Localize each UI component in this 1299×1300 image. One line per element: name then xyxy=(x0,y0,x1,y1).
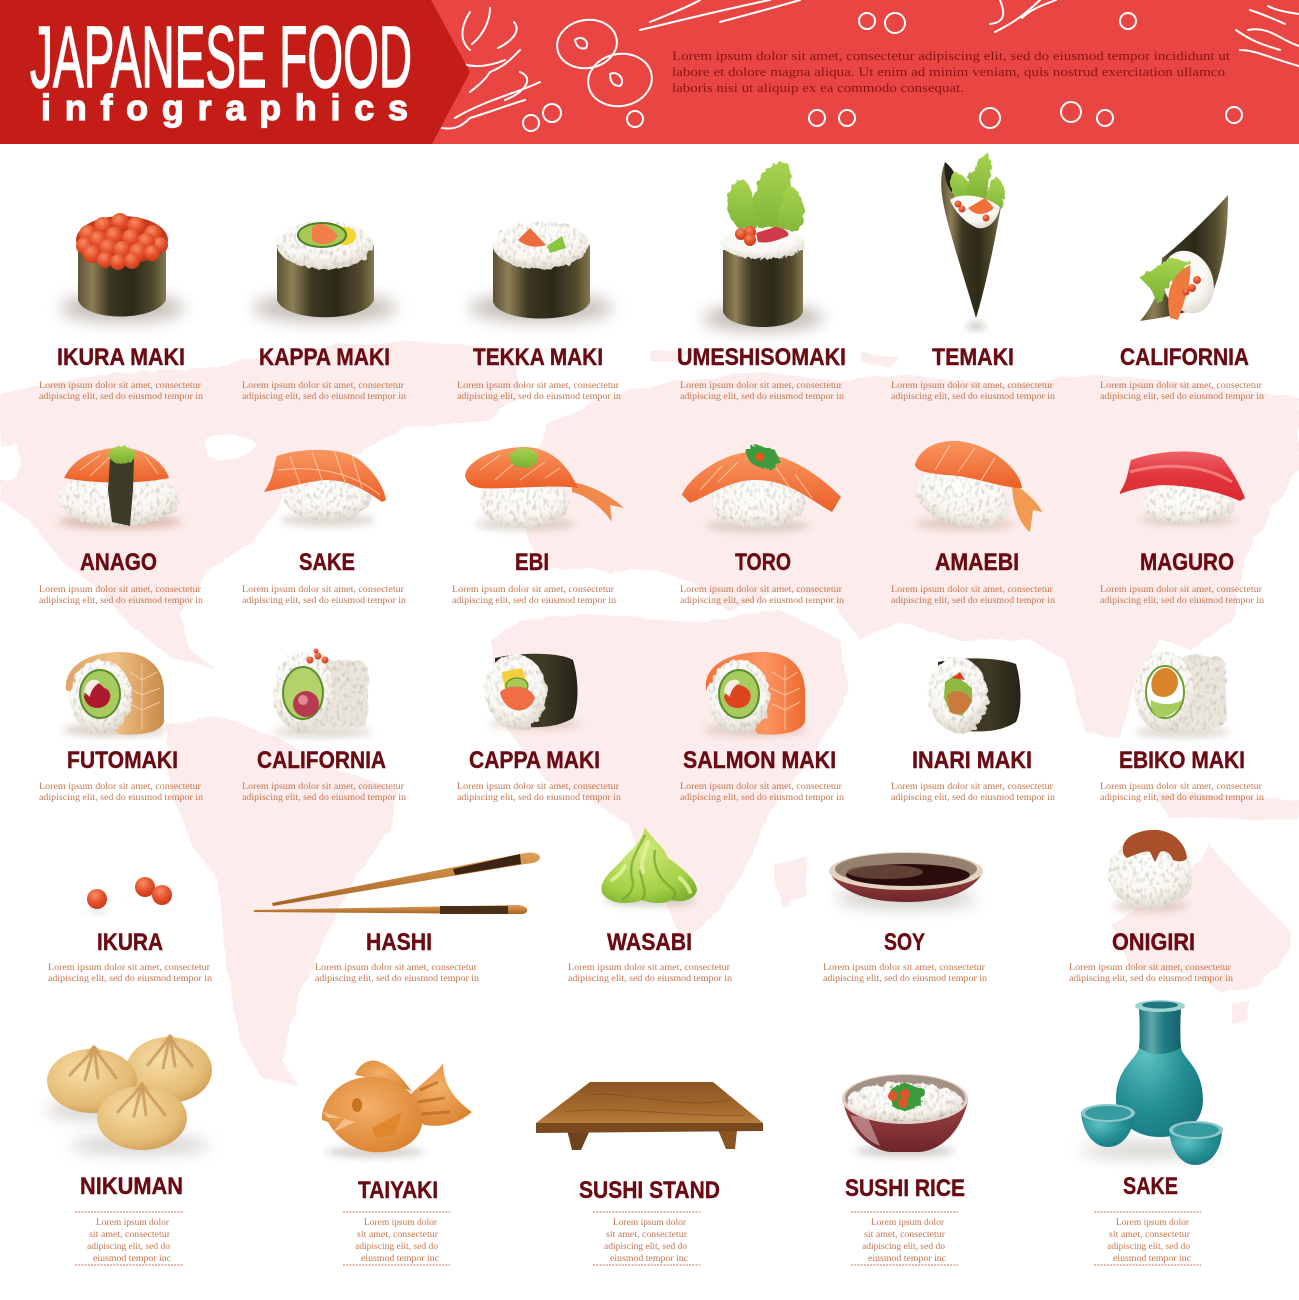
description: Lorem ipsum dolor sit amet, consectetur xyxy=(48,962,211,973)
item: Ebiko Maki xyxy=(1100,652,1264,803)
description xyxy=(680,781,844,803)
icon: california piece xyxy=(272,648,372,737)
description: eiusmod tempor inc xyxy=(868,1253,946,1264)
description xyxy=(457,781,621,803)
description xyxy=(48,962,212,984)
description: adipiscing elit, sed do eiusmod tempor in xyxy=(1100,391,1264,402)
icon: kappa maki roll xyxy=(253,221,397,322)
description xyxy=(457,380,621,402)
description: sit amet, consectetur xyxy=(606,1229,688,1240)
icon: soy sauce dish xyxy=(829,852,983,907)
description xyxy=(242,584,406,606)
description xyxy=(1100,584,1264,606)
label: UMESHISOMAKI xyxy=(677,344,846,371)
description: Lorem ipsum dolor xyxy=(613,1217,687,1228)
description xyxy=(593,1212,700,1265)
label: TAIYAKI xyxy=(358,1177,438,1204)
description: adipiscing elit, sed do xyxy=(862,1241,945,1252)
description: Lorem ipsum dolor xyxy=(96,1217,170,1228)
description: adipiscing elit, sed do eiusmod tempor in xyxy=(680,792,844,803)
item: Sushi Stand xyxy=(536,1082,763,1265)
description: Lorem ipsum dolor sit amet, consectetur xyxy=(1100,584,1263,595)
label: ANAGO xyxy=(80,549,157,576)
description: adipiscing elit, sed do eiusmod tempor in xyxy=(891,391,1055,402)
label: SALMON MAKI xyxy=(683,747,836,774)
intro text: Lorem ipsum dolor sit amet, consectetur adipiscing elit, sed do eiusmod tempor incididunt ut xyxy=(672,48,1230,63)
label: NIKUMAN xyxy=(80,1173,183,1200)
description: sit amet, consectetur xyxy=(89,1229,171,1240)
description xyxy=(242,781,406,803)
description: Lorem ipsum dolor sit amet, consectetur xyxy=(891,380,1054,391)
item: Anago xyxy=(39,446,203,606)
item: Wasabi xyxy=(568,827,732,984)
description: Lorem ipsum dolor sit amet, consectetur xyxy=(891,584,1054,595)
item: Soy xyxy=(823,852,987,984)
icon: rice bowl xyxy=(842,1074,968,1156)
item: Maguro xyxy=(1100,452,1264,606)
icon: sake flask and cups xyxy=(1080,1000,1223,1165)
title: JAPANESE FOOD xyxy=(30,9,412,106)
icon: chopsticks xyxy=(254,852,540,914)
icon: amaebi nigiri xyxy=(908,441,1042,537)
description: adipiscing elit, sed do eiusmod tempor in xyxy=(242,391,406,402)
item: Hashi xyxy=(254,852,540,984)
description: Lorem ipsum dolor xyxy=(1116,1217,1190,1228)
icon: taiyaki fish cake xyxy=(322,1061,472,1157)
item: Ebi xyxy=(452,447,624,606)
intro text: laboris nisi ut aliquip ex ea commodo consequat. xyxy=(672,80,964,95)
description: adipiscing elit, sed do xyxy=(1107,1241,1190,1252)
item: Kappa Maki xyxy=(242,221,406,402)
description: Lorem ipsum dolor sit amet, consectetur xyxy=(242,584,405,595)
description: adipiscing elit, sed do eiusmod tempor in xyxy=(1100,792,1264,803)
description xyxy=(680,584,844,606)
description: adipiscing elit, sed do eiusmod tempor in xyxy=(457,792,621,803)
label: HASHI xyxy=(366,929,432,956)
description: Lorem ipsum dolor sit amet, consectetur xyxy=(891,781,1054,792)
label: MAGURO xyxy=(1140,549,1234,576)
description: Lorem ipsum dolor sit amet, consectetur xyxy=(39,380,202,391)
description xyxy=(39,380,203,402)
label: TEMAKI xyxy=(932,344,1014,371)
item: Sushi Rice xyxy=(842,1074,968,1265)
label: AMAEBI xyxy=(935,549,1019,576)
description: adipiscing elit, sed do eiusmod tempor in xyxy=(568,973,732,984)
description: adipiscing elit, sed do eiusmod tempor in xyxy=(891,792,1055,803)
description: Lorem ipsum dolor sit amet, consectetur xyxy=(452,584,615,595)
label: IKURA xyxy=(97,929,163,956)
description: adipiscing elit, sed do eiusmod tempor in xyxy=(1100,595,1264,606)
icon: temaki cone xyxy=(941,153,1004,329)
icon: inari maki piece xyxy=(924,654,1020,736)
label: SOY xyxy=(884,929,925,956)
world map background xyxy=(0,342,1299,1086)
item: California piece xyxy=(242,648,406,803)
icon: roe balls xyxy=(87,877,172,913)
item: California hand roll xyxy=(1100,195,1264,402)
description: eiusmod tempor inc xyxy=(610,1253,688,1264)
icon: nikuman buns xyxy=(46,1034,212,1153)
item: Ikura xyxy=(48,877,212,984)
description xyxy=(568,962,732,984)
label: CAPPA MAKI xyxy=(469,747,600,774)
label: EBI xyxy=(515,549,549,576)
description: adipiscing elit, sed do eiusmod tempor in xyxy=(457,391,621,402)
description xyxy=(1094,1212,1201,1265)
description xyxy=(891,781,1055,803)
label: EBIKO MAKI xyxy=(1119,747,1245,774)
description: Lorem ipsum dolor sit amet, consectetur xyxy=(457,781,620,792)
label: FUTOMAKI xyxy=(67,747,178,774)
label: INARI MAKI xyxy=(912,747,1032,774)
item: Amaebi xyxy=(891,441,1055,606)
icon: cappa maki piece xyxy=(481,651,581,733)
icon: tekka maki roll xyxy=(469,221,613,322)
description: adipiscing elit, sed do eiusmod tempor in xyxy=(823,973,987,984)
item: Umeshisomaki xyxy=(677,162,846,402)
item: Salmon Maki xyxy=(680,652,844,803)
description: adipiscing elit, sed do eiusmod tempor in xyxy=(48,973,212,984)
description: Lorem ipsum dolor sit amet, consectetur xyxy=(242,781,405,792)
item: Sake nigiri xyxy=(242,450,406,606)
description xyxy=(823,962,987,984)
intro text xyxy=(672,48,1230,95)
icon: california cone xyxy=(1140,195,1228,321)
item: Taiyaki xyxy=(322,1061,472,1265)
label: WASABI xyxy=(607,929,692,956)
description: adipiscing elit, sed do eiusmod tempor in xyxy=(452,595,616,606)
subtitle: infographics xyxy=(41,87,408,128)
intro text: labore et dolore magna aliqua. Ut enim ad minim veniam, quis nostrud exercitation ullamco xyxy=(672,64,1225,79)
description: Lorem ipsum dolor sit amet, consectetur xyxy=(1069,962,1232,973)
description: adipiscing elit, sed do xyxy=(604,1241,687,1252)
description: adipiscing elit, sed do eiusmod tempor in xyxy=(1069,973,1233,984)
icon: anago nigiri xyxy=(58,446,182,529)
description: eiusmod tempor inc xyxy=(93,1253,171,1264)
description: Lorem ipsum dolor sit amet, consectetur xyxy=(680,584,843,595)
description: eiusmod tempor inc xyxy=(361,1253,439,1264)
label: SUSHI RICE xyxy=(845,1175,965,1202)
description: sit amet, consectetur xyxy=(1109,1229,1191,1240)
label: ONIGIRI xyxy=(1112,929,1195,956)
description: Lorem ipsum dolor sit amet, consectetur xyxy=(457,380,620,391)
description: Lorem ipsum dolor xyxy=(364,1217,438,1228)
description xyxy=(75,1212,183,1265)
item: Inari Maki xyxy=(891,654,1055,803)
description xyxy=(343,1212,450,1265)
description: adipiscing elit, sed do eiusmod tempor in xyxy=(242,595,406,606)
description: sit amet, consectetur xyxy=(357,1229,439,1240)
description: Lorem ipsum dolor sit amet, consectetur xyxy=(1100,781,1263,792)
label: SUSHI STAND xyxy=(579,1177,720,1204)
description: adipiscing elit, sed do eiusmod tempor in xyxy=(315,973,479,984)
title ribbon xyxy=(0,0,470,144)
description: Lorem ipsum dolor sit amet, consectetur xyxy=(315,962,478,973)
icon: umeshisomaki roll with leaves xyxy=(703,162,823,330)
description: sit amet, consectetur xyxy=(864,1229,946,1240)
description xyxy=(1069,962,1233,984)
icon: ebiko maki piece xyxy=(1134,652,1230,737)
description xyxy=(680,380,844,402)
description: Lorem ipsum dolor sit amet, consectetur xyxy=(242,380,405,391)
description xyxy=(39,584,203,606)
description: Lorem ipsum dolor sit amet, consectetur xyxy=(39,781,202,792)
icon: toro nigiri xyxy=(682,445,841,532)
label: CALIFORNIA xyxy=(1120,344,1249,371)
item: Sake bottle xyxy=(1080,1000,1223,1265)
description: Lorem ipsum dolor sit amet, consectetur xyxy=(39,584,202,595)
icon: maguro nigiri xyxy=(1120,452,1245,525)
label: SAKE xyxy=(299,549,355,576)
item: Futomaki xyxy=(39,652,203,803)
header background xyxy=(0,0,1299,144)
label: TORO xyxy=(735,549,791,576)
description: Lorem ipsum dolor sit amet, consectetur xyxy=(1100,380,1263,391)
header banner xyxy=(0,0,1299,144)
description: adipiscing elit, sed do eiusmod tempor in xyxy=(39,595,203,606)
description: Lorem ipsum dolor sit amet, consectetur xyxy=(823,962,986,973)
label: TEKKA MAKI xyxy=(473,344,603,371)
description: Lorem ipsum dolor xyxy=(871,1217,945,1228)
description: adipiscing elit, sed do xyxy=(355,1241,438,1252)
description: adipiscing elit, sed do xyxy=(87,1241,170,1252)
label: CALIFORNIA xyxy=(257,747,386,774)
map inland seas xyxy=(0,435,650,600)
description: adipiscing elit, sed do eiusmod tempor in xyxy=(39,391,203,402)
description: adipiscing elit, sed do eiusmod tempor in xyxy=(680,391,844,402)
description: adipiscing elit, sed do eiusmod tempor in xyxy=(242,792,406,803)
item: Cappa Maki xyxy=(457,651,621,803)
item: Onigiri xyxy=(1069,830,1233,984)
icon: ikura maki roll xyxy=(60,213,184,322)
description: adipiscing elit, sed do eiusmod tempor in xyxy=(680,595,844,606)
label: SAKE xyxy=(1123,1173,1178,1200)
label: IKURA MAKI xyxy=(57,344,185,371)
icon: sake nigiri xyxy=(264,450,386,526)
description xyxy=(1100,380,1264,402)
description xyxy=(242,380,406,402)
description: eiusmod tempor inc xyxy=(1113,1253,1191,1264)
description: Lorem ipsum dolor sit amet, consectetur xyxy=(680,380,843,391)
item: Temaki xyxy=(891,153,1055,402)
sketch decorations xyxy=(442,0,1299,131)
description xyxy=(891,584,1055,606)
description: adipiscing elit, sed do eiusmod tempor in xyxy=(891,595,1055,606)
description: Lorem ipsum dolor sit amet, consectetur xyxy=(680,781,843,792)
icon: salmon maki piece xyxy=(703,652,807,736)
description xyxy=(452,584,616,606)
icon: onigiri xyxy=(1108,830,1192,912)
label: KAPPA MAKI xyxy=(259,344,390,371)
icon: wooden sushi stand xyxy=(536,1082,763,1150)
description xyxy=(39,781,203,803)
description: adipiscing elit, sed do eiusmod tempor in xyxy=(39,792,203,803)
icon: wasabi mound xyxy=(601,827,697,906)
description: Lorem ipsum dolor sit amet, consectetur xyxy=(568,962,731,973)
description xyxy=(891,380,1055,402)
icon: ebi nigiri xyxy=(465,447,624,530)
item: Nikuman xyxy=(46,1034,212,1265)
item: Ikura Maki xyxy=(39,213,203,402)
description xyxy=(851,1212,958,1265)
item: Tekka Maki xyxy=(457,221,621,402)
icon: futomaki piece xyxy=(63,652,167,736)
description xyxy=(1100,781,1264,803)
description xyxy=(315,962,479,984)
item: Toro xyxy=(680,445,844,606)
